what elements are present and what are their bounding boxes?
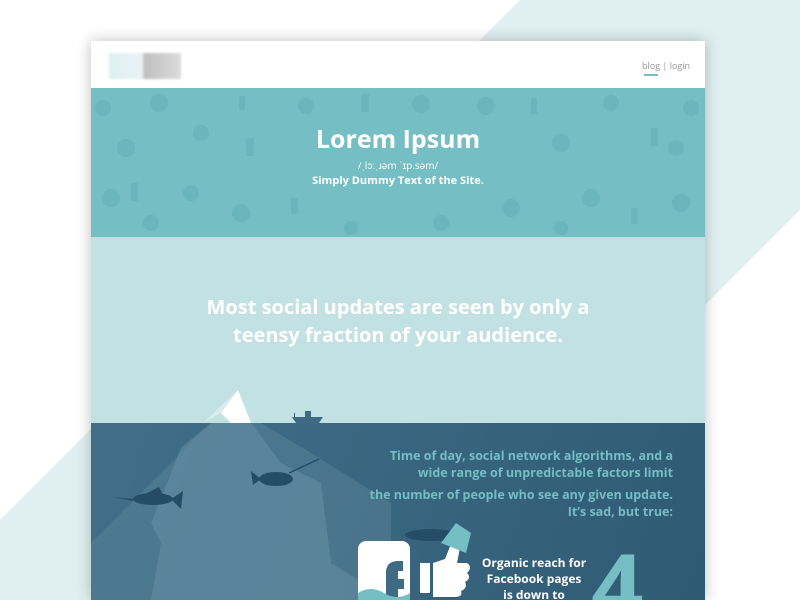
description text: [370, 447, 673, 520]
nav links: blog | login: [642, 59, 690, 72]
description text: Time of day, social network algorithms, and a: [390, 447, 673, 464]
stat text: [482, 554, 586, 600]
description text: It’s sad, but true:: [568, 503, 673, 520]
pronunciation: /ˌlɔːˌɹəm ˈɪp.səm/: [358, 158, 438, 172]
banner: [91, 88, 705, 237]
boat: [292, 411, 323, 423]
background icons pattern: [95, 94, 699, 235]
iceberg tip: [203, 390, 251, 423]
iceberg tip and boat: [204, 390, 323, 423]
logo (blurred): [109, 53, 181, 79]
notch: [385, 237, 409, 251]
headline: Most social updates are seen by only a: [207, 293, 589, 320]
ocean section: [91, 423, 705, 600]
whale: [405, 529, 457, 541]
stat text: Organic reach for: [482, 554, 586, 571]
fish: sailfish: [113, 487, 183, 509]
narwhal: [251, 459, 319, 486]
subtitle: Simply Dummy Text of the Site.: [312, 173, 484, 188]
icon: facebook thumbs up: [358, 523, 471, 600]
headline: teensy fraction of your audience.: [233, 321, 563, 348]
iceberg underwater: [91, 423, 450, 600]
header: [91, 41, 705, 88]
description text: wide range of unpredictable factors limit the number of people who see any given update.: [370, 464, 673, 503]
title: Lorem Ipsum: [316, 122, 480, 156]
light section: [91, 237, 705, 423]
headline: [207, 293, 589, 348]
page card: [91, 41, 705, 600]
stat text: Facebook pages: [487, 570, 581, 587]
